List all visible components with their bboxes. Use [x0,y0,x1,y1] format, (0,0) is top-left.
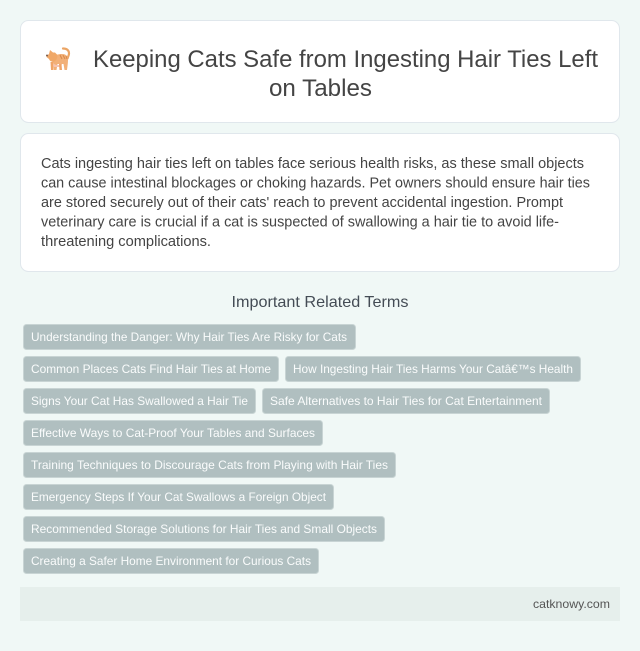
title: Keeping Cats Safe from Ingesting Hair Ties Left [93,46,598,73]
icon: cat [46,48,69,70]
panel: description [20,134,620,272]
tag: Effective Ways to Cat-Proof Your Tables and Surfaces [31,426,315,440]
heading: related terms: Important Related Terms [232,294,408,311]
tag: Recommended Storage Solutions for Hair Ties and Small Objects [31,522,377,536]
footer: catknowy.com [533,597,610,611]
footer [20,587,620,621]
text block: description: are stored securely out of their cats' reach to prevent accidental ingestion. Prompt [41,195,563,211]
tag list [24,324,580,574]
tag [262,388,550,414]
tag: Training Techniques to Discourage Cats from Playing with Hair Ties [31,458,388,472]
tag: How Ingesting Hair Ties Harms Your Catâ€™s Health [293,362,573,376]
tag [24,484,334,510]
tag [24,324,356,350]
text block: description: Cats ingesting hair ties left on tables face serious health risks, as these small objects [41,156,584,172]
text block: description: can cause intestinal blockages or choking hazards. Pet owners should ensure hair ties [41,176,590,192]
tag: Safe Alternatives to Hair Ties for Cat Entertainment [270,394,543,408]
tag [24,420,322,446]
tag: Signs Your Cat Has Swallowed a Hair Tie [31,394,248,408]
tag [24,548,318,574]
tag [24,388,256,414]
tag: Creating a Safer Home Environment for Curious Cats [31,554,311,568]
tag [24,516,384,542]
title: on Tables [269,75,372,102]
text block: description: threatening complications. [41,234,211,250]
panel: title card [20,20,620,122]
text block: description: veterinary care is crucial if a cat is suspected of swallowing a hair tie to avoid life- [41,214,559,230]
text block: description [41,156,590,250]
tag [24,356,278,382]
tag: Common Places Cats Find Hair Ties at Home [31,362,271,376]
tag [286,356,580,382]
tag: Emergency Steps If Your Cat Swallows a Foreign Object [31,490,327,504]
title [93,46,598,102]
tag [24,452,396,478]
tag: Understanding the Danger: Why Hair Ties Are Risky for Cats [31,330,347,344]
